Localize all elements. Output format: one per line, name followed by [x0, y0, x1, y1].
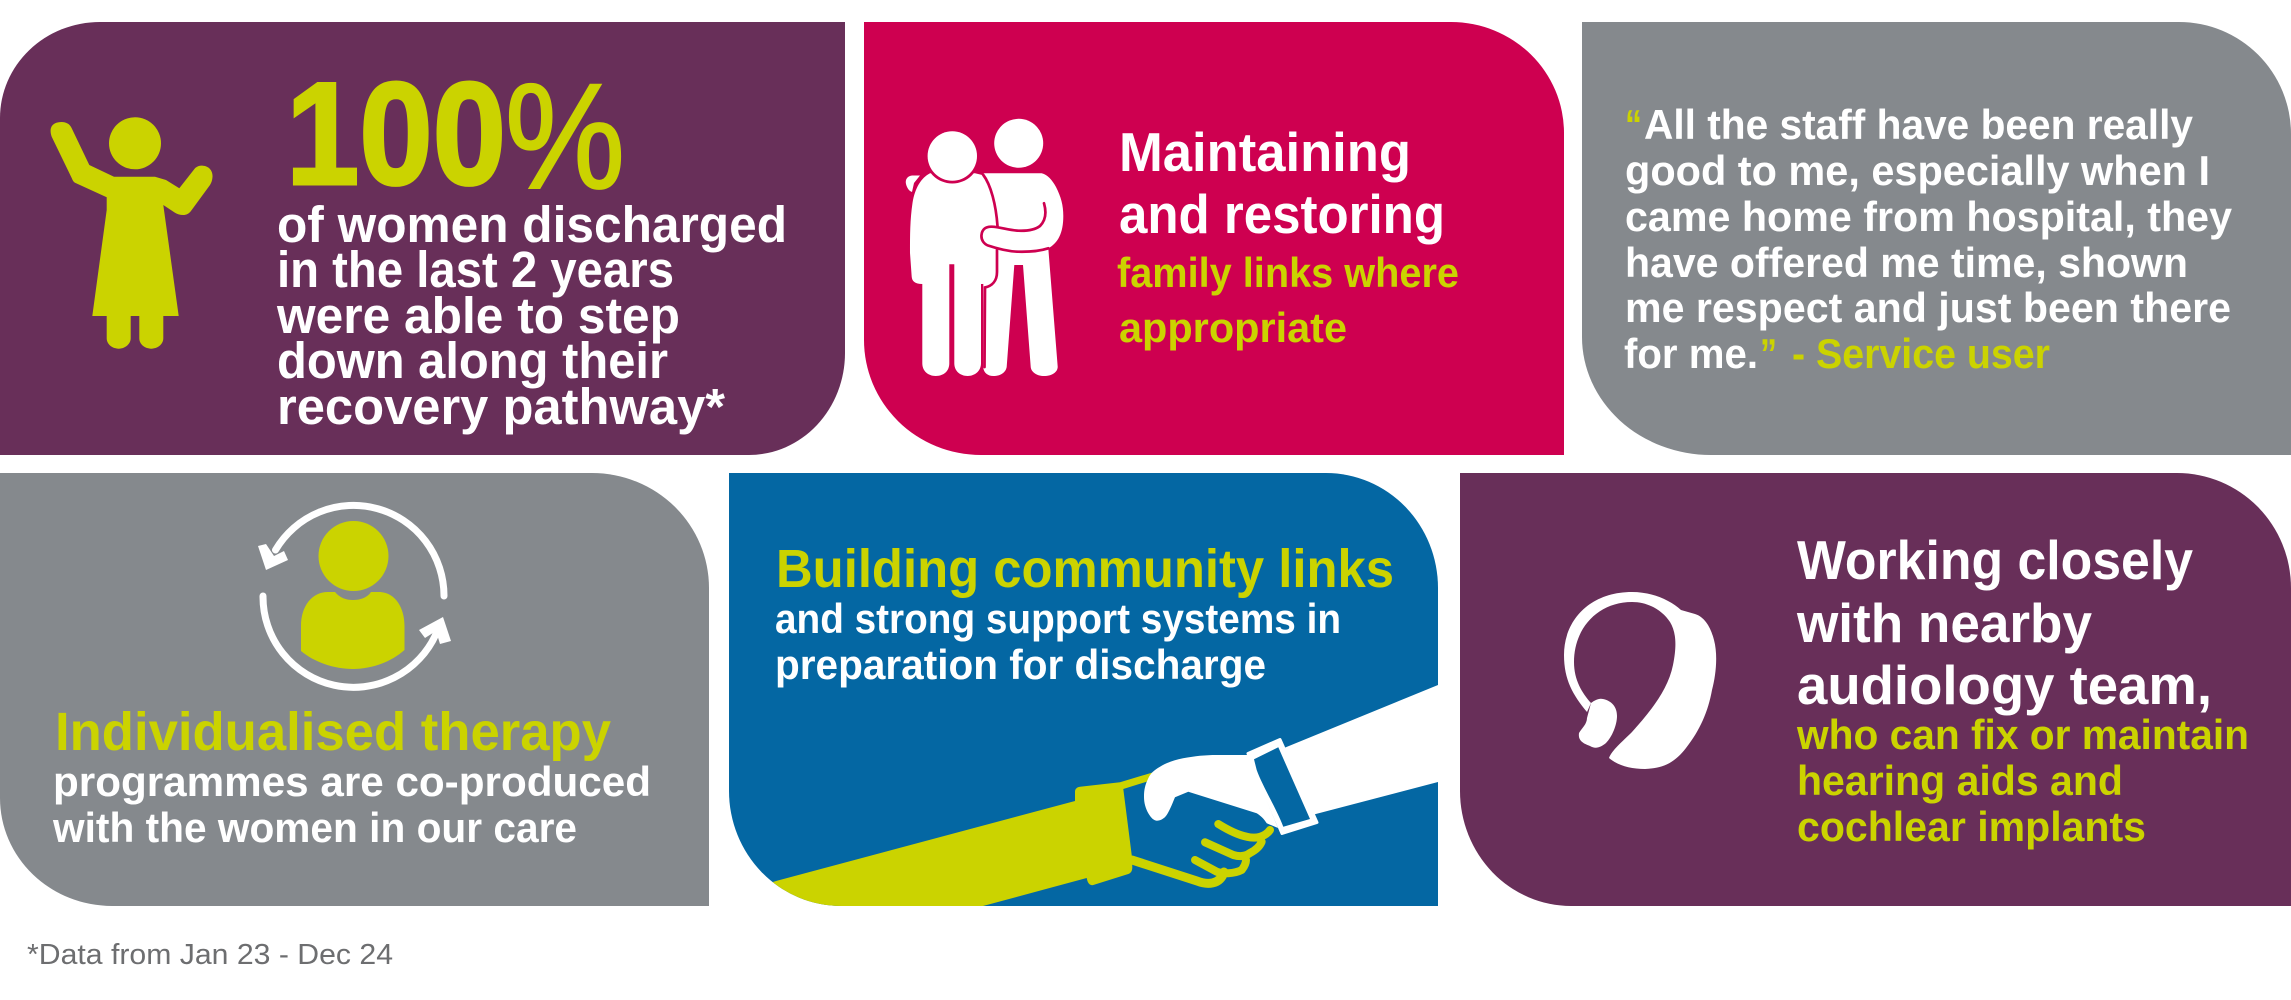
- panel background: grey: [0, 473, 709, 906]
- text: quote: came home from hospital, they: [1625, 193, 2233, 240]
- panel background: pink: [864, 22, 1564, 455]
- icon: person in cycle arrows: [258, 505, 451, 687]
- heading: maintaining and restoring: Maintaining: [1119, 121, 1411, 183]
- text: women discharged statement: of women discharged: [277, 196, 787, 253]
- panel background: grey: [1582, 22, 2291, 455]
- text: quote: good to me, especially when I: [1625, 147, 2210, 194]
- text: quote: have offered me time, shown: [1625, 239, 2188, 286]
- big number: 100%: [286, 52, 625, 220]
- footnote: *Data from Jan 23 - Dec 24: [27, 939, 393, 971]
- heading: working closely: [1796, 529, 2212, 716]
- text: quote: “: [1625, 101, 1642, 148]
- heading: individualised therapy: Individualised therapy: [55, 702, 611, 762]
- text: programmes co-produced: programmes are co-produced: [53, 758, 651, 805]
- text: quote: [1624, 101, 2233, 377]
- heading: working closely: audiology team,: [1797, 654, 2212, 716]
- text: women discharged statement: recovery pathway*: [277, 378, 725, 435]
- text: family links where appropriate: appropriate: [1119, 304, 1347, 351]
- icon: two people embracing: [906, 119, 1063, 376]
- icon: handshake: [700, 685, 1438, 906]
- panel: audiology team: [1460, 473, 2291, 906]
- panel background: blue: [729, 473, 1438, 906]
- panel: community links: [700, 473, 1438, 906]
- text: quote: All the staff have been really: [1644, 101, 2194, 148]
- panel: individualised therapy: [0, 473, 709, 906]
- panel: service user quote: [1582, 22, 2291, 455]
- panel background: purple: [0, 22, 845, 455]
- text: women discharged statement: down along their: [277, 332, 668, 389]
- text: family links where appropriate: family links where: [1117, 249, 1459, 296]
- icon: hearing aid: [1564, 592, 1716, 769]
- heading: maintaining and restoring: [1119, 121, 1445, 245]
- text: support systems: [775, 595, 1341, 688]
- heading: working closely: Working closely: [1797, 529, 2193, 591]
- text: quote: ”: [1760, 330, 1777, 377]
- text: programmes co-produced: with the women in our care: [52, 804, 577, 851]
- text: quote: - Service user: [1792, 330, 2050, 377]
- icon: woman waving: [51, 117, 213, 349]
- panel background: purple: [1460, 473, 2291, 906]
- text: hearing aids and cochlear implants: hearing aids and: [1797, 757, 2123, 804]
- panel: family links: [864, 22, 1564, 455]
- text: support systems: preparation for discharge: [775, 641, 1266, 688]
- text: quote: for me.: [1624, 330, 1758, 377]
- big number: 100%: %: [505, 52, 625, 220]
- text: hearing aids and cochlear implants: who can fix or maintain: [1796, 711, 2249, 758]
- text: support systems: and strong support systems in: [775, 595, 1341, 642]
- heading: building community links: Building community links: [776, 539, 1394, 599]
- big number: 100%: 100: [286, 52, 506, 215]
- heading: maintaining and restoring: and restoring: [1119, 183, 1445, 245]
- text: women discharged statement: [276, 196, 787, 435]
- text: women discharged statement: were able to step: [276, 287, 680, 344]
- text: hearing aids and cochlear implants: [1796, 711, 2249, 850]
- heading: working closely: with nearby: [1796, 592, 2092, 654]
- panel: 100% of women stepped down: [0, 22, 845, 455]
- text: women discharged statement: in the last 2 years: [277, 241, 674, 298]
- text: programmes co-produced: [52, 758, 651, 851]
- text: quote: me respect and just been there: [1625, 284, 2231, 331]
- text: family links where appropriate: [1117, 249, 1459, 351]
- text: hearing aids and cochlear implants: cochlear implants: [1797, 803, 2146, 850]
